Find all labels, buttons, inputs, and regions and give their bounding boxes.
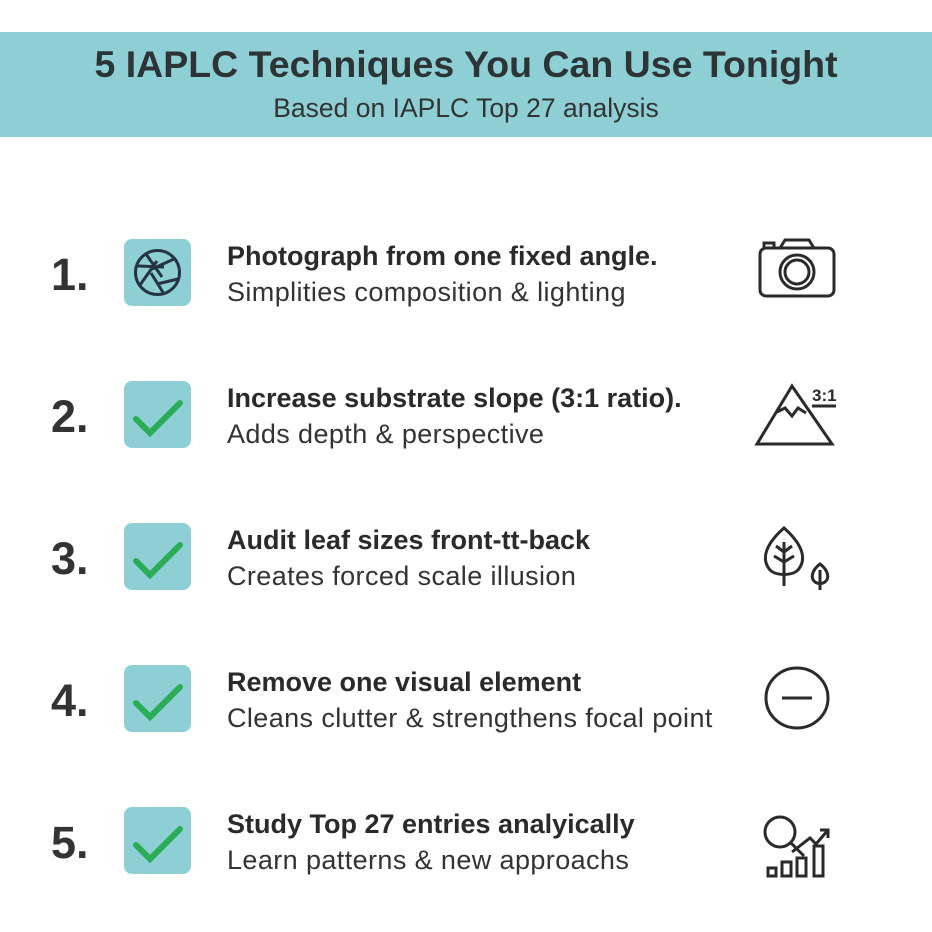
check box 4	[124, 665, 191, 732]
icon: magnifier chart	[764, 816, 830, 878]
row 2	[51, 381, 837, 449]
heading 4: Remove one visual element	[227, 667, 581, 697]
icon: minus circle	[764, 666, 830, 730]
sub 5: Learn patterns & new approachs	[227, 845, 629, 875]
header band	[0, 32, 932, 137]
sub 3: Creates forced scale illusion	[227, 561, 576, 591]
row 1	[51, 238, 836, 307]
subtitle: Based on IAPLC Top 27 analysis	[273, 93, 659, 123]
sub 2: Adds depth & perspective	[227, 419, 544, 449]
sub 1: Simplities composition & lighting	[227, 277, 626, 307]
heading 5: Study Top 27 entries analyically	[227, 809, 635, 839]
title: 5 IAPLC Techniques You Can Use Tonight	[94, 43, 838, 85]
check box 2	[124, 381, 191, 448]
check box 5	[124, 807, 191, 874]
icon: mountain: 3:1	[812, 386, 837, 405]
icon: aperture	[124, 239, 191, 306]
check box 3	[124, 523, 191, 590]
number 4: 4.	[51, 675, 89, 726]
row 4	[51, 665, 830, 733]
row 5	[51, 807, 830, 878]
number 1: 1.	[51, 249, 89, 300]
icon: leaves	[764, 526, 830, 590]
icon: camera	[758, 238, 836, 298]
heading 3: Audit leaf sizes front-tt-back	[227, 525, 590, 555]
icon: mountain	[754, 383, 837, 446]
heading 1: Photograph from one fixed angle.	[227, 241, 658, 271]
heading 2: Increase substrate slope (3:1 ratio).	[227, 383, 682, 413]
row 3	[51, 523, 830, 591]
number 5: 5.	[51, 817, 89, 868]
number 3: 3.	[51, 533, 89, 584]
number 2: 2.	[51, 391, 89, 442]
sub 4: Cleans clutter & strengthens focal point	[227, 703, 713, 733]
